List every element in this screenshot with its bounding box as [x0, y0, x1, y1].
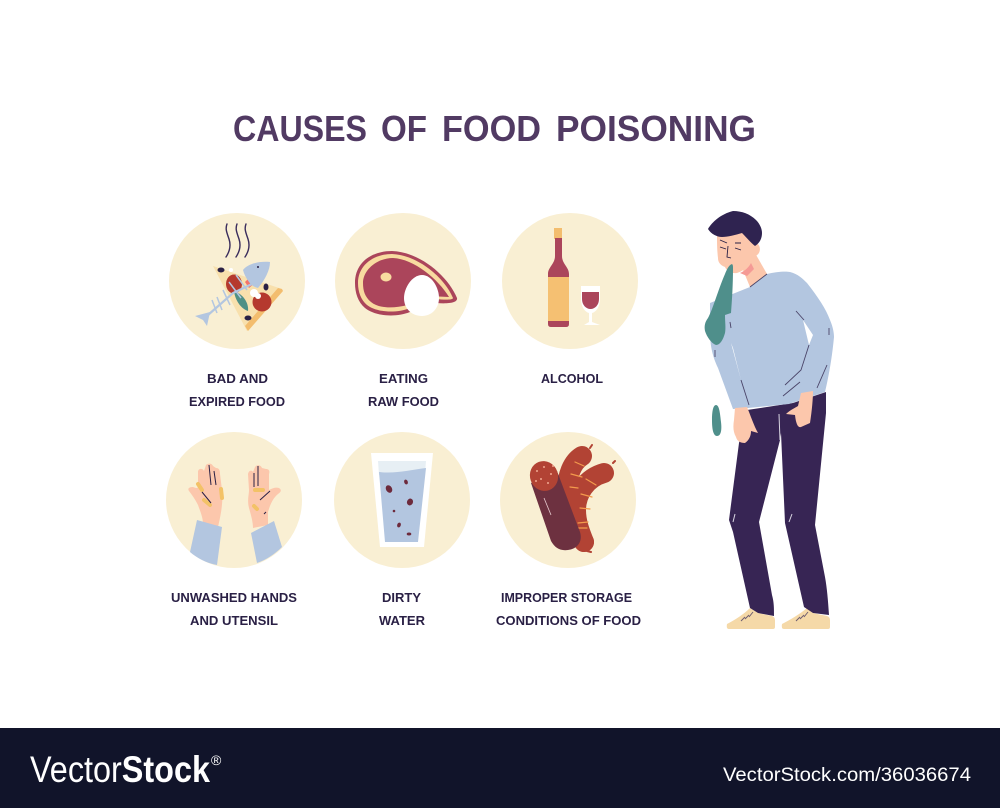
icon: fish skeleton — [195, 262, 270, 326]
neck shadow — [740, 263, 754, 276]
label: unwashed hands and utensil — [171, 590, 297, 628]
label: dirty water — [379, 590, 426, 628]
registered mark: ® — [211, 752, 222, 768]
title: POISONING — [556, 108, 756, 149]
icon: left hand — [188, 464, 222, 527]
label: eating raw food: EATING — [379, 371, 428, 386]
footer bar — [0, 728, 1000, 808]
label: alcohol: ALCOHOL — [541, 371, 603, 386]
icon: steam — [226, 224, 249, 257]
figure: sick man — [705, 211, 834, 629]
label: unwashed hands and utensil: AND UTENSIL — [190, 613, 278, 628]
neck — [743, 253, 767, 287]
panel: improper storage — [500, 432, 636, 568]
label: bad and expired food: EXPIRED FOOD — [189, 394, 285, 409]
circle background — [169, 213, 305, 349]
icon: fat spot — [380, 272, 392, 282]
sweater creases — [715, 274, 829, 405]
panel: eating raw food — [335, 213, 471, 349]
icon: sausage back — [567, 445, 615, 552]
footer url: VectorStock.com/36036674 — [723, 764, 971, 786]
icon: water — [379, 468, 426, 542]
footer logo: VectorStock — [30, 749, 210, 790]
label: improper storage conditions: IMPROPER STORAGE — [501, 590, 632, 605]
circle background — [334, 432, 470, 568]
label: unwashed hands and utensil: UNWASHED HANDS — [171, 590, 297, 605]
panel: unwashed hands — [166, 432, 302, 568]
icon: raw steak — [355, 251, 457, 315]
shoes — [727, 608, 830, 629]
icon: wine glass — [581, 286, 600, 325]
hair — [708, 211, 762, 246]
face — [717, 228, 760, 273]
icon: water surface — [378, 461, 426, 475]
panel: dirty water — [334, 432, 470, 568]
icon: left sleeve — [190, 520, 222, 565]
title: OF — [381, 108, 427, 149]
label: eating raw food — [368, 371, 439, 409]
icon: wine bottle — [548, 228, 569, 327]
icon: egg — [404, 275, 439, 316]
circle background — [502, 213, 638, 349]
title: FOOD — [442, 108, 541, 149]
circle background — [500, 432, 636, 568]
icon: salami — [526, 457, 581, 550]
label: dirty water: WATER — [379, 613, 426, 628]
circle background — [166, 432, 302, 568]
trouser creases — [733, 414, 792, 522]
label: bad and expired food — [189, 371, 285, 409]
label: improper storage conditions — [496, 590, 641, 628]
label: dirty water: DIRTY — [382, 590, 421, 605]
title: CAUSES — [233, 108, 367, 149]
panel: bad and expired food — [169, 213, 305, 349]
circle background — [335, 213, 471, 349]
label: improper storage conditions: CONDITIONS OF FOOD — [496, 613, 641, 628]
label: eating raw food: RAW FOOD — [368, 394, 439, 409]
hands — [733, 391, 813, 443]
icon: pizza slice — [213, 266, 283, 331]
icon: right hand — [248, 465, 281, 528]
vomit drop — [712, 405, 721, 436]
panel: alcohol — [502, 213, 638, 349]
icon: dirt particles — [384, 479, 414, 536]
vomit stream — [705, 264, 733, 345]
sweater — [710, 272, 834, 409]
label: bad and expired food: BAD AND — [207, 371, 268, 386]
icon: glass — [371, 453, 433, 547]
trousers — [729, 392, 829, 616]
eyes and nose — [720, 240, 741, 258]
icon: right sleeve — [251, 521, 282, 563]
arm gaps — [731, 320, 813, 380]
title — [233, 108, 756, 149]
